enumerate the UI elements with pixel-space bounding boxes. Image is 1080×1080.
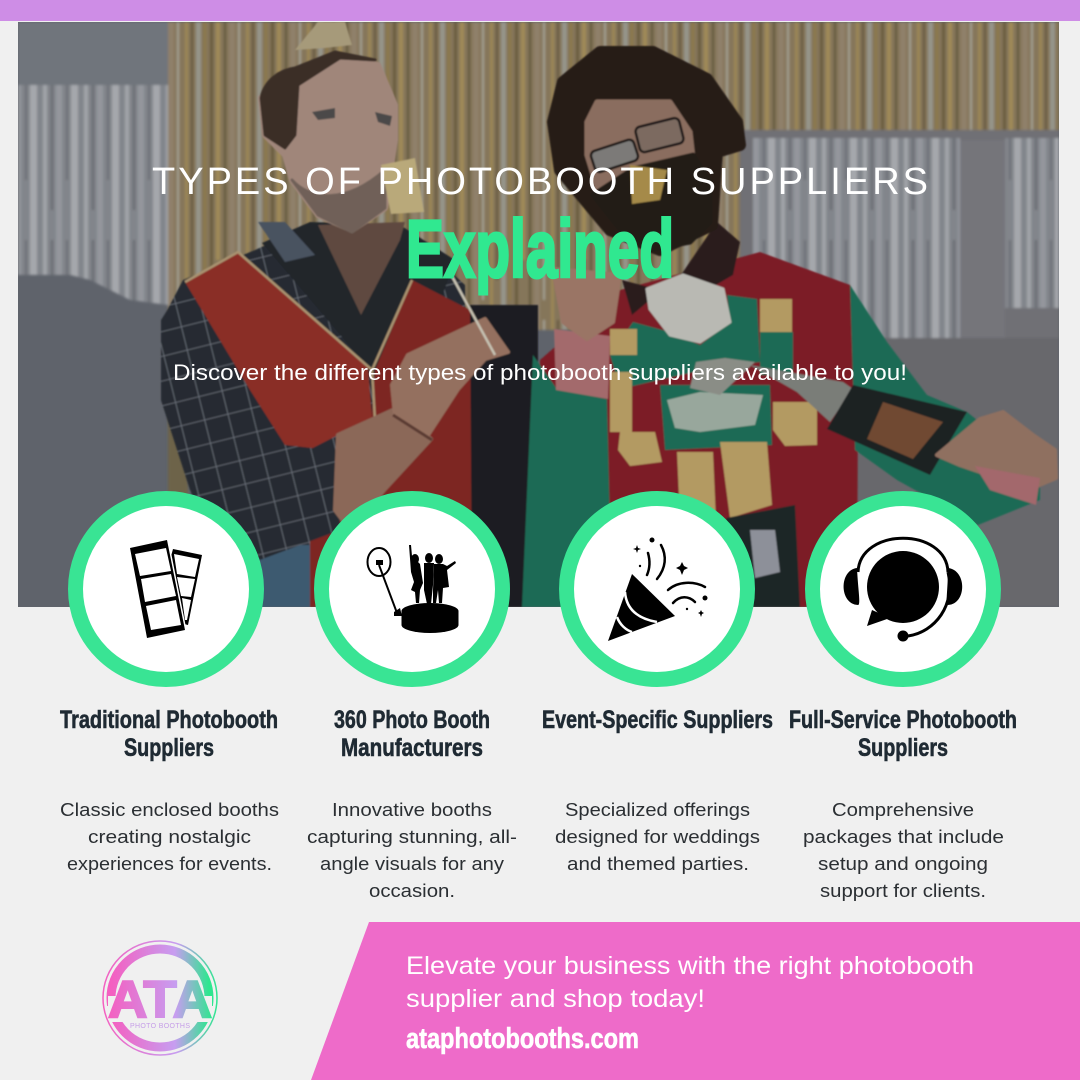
heading [60, 706, 278, 762]
dark figure behind hand [468, 305, 538, 607]
title [152, 161, 928, 295]
description: Specialized offerings [565, 799, 750, 820]
panel: 360 photo booth manufacturers [307, 498, 517, 901]
description [803, 799, 1004, 901]
description [60, 799, 279, 874]
website url: ataphotobooths.com [406, 1023, 639, 1055]
call-to-action banner [311, 922, 1080, 1080]
description: Comprehensive [832, 799, 974, 820]
title: TYPES OF PHOTOBOOTH SUPPLIERS [152, 161, 928, 203]
heading: Event-Specific Suppliers [542, 706, 773, 734]
heading: Full-Service Photobooth [789, 706, 1017, 734]
icon badge: party popper [566, 498, 748, 680]
call-to-action text: Elevate your business with the right photobooth [406, 952, 974, 980]
description: experiences for events. [67, 853, 272, 874]
logo: ATA Photo Booths: ATA [108, 971, 212, 1029]
heading [789, 706, 1017, 762]
icon badge: photo strips [76, 498, 256, 680]
description: setup and ongoing [818, 853, 988, 874]
forearm and hand [335, 409, 431, 530]
panel: traditional photobooth suppliers [60, 498, 279, 874]
description [555, 799, 760, 874]
description: support for clients. [820, 880, 986, 901]
heading: Suppliers [858, 734, 948, 762]
description: angle visuals for any [320, 853, 505, 874]
description: and themed parties. [567, 853, 749, 874]
vest [185, 252, 375, 455]
description: packages that include [803, 826, 1004, 847]
plaid sleeve [160, 313, 340, 560]
green sleeve left [522, 355, 612, 607]
call-to-action text: supplier and shop today! [406, 985, 705, 1013]
heading: Manufacturers [341, 734, 483, 762]
heading [334, 706, 490, 762]
description: creating nostalgic [88, 826, 251, 847]
right sleeve [850, 285, 1040, 525]
icon badge: 360 booth platform [322, 498, 502, 680]
heading: Traditional Photobooth [60, 706, 278, 734]
description: occasion. [369, 880, 455, 901]
description: designed for weddings [555, 826, 760, 847]
top accent bar [0, 0, 1080, 21]
right tinsel and wall [740, 130, 1059, 350]
description [307, 799, 517, 901]
panel: event-specific suppliers [542, 498, 773, 874]
right man hair, face, beard [553, 52, 740, 250]
logo: ATA Photo Booths [103, 941, 217, 1055]
chest pieces [610, 295, 760, 389]
title accent word: Explained [406, 204, 674, 295]
icon badge: headset speech bubble [812, 498, 994, 680]
heading: Suppliers [124, 734, 214, 762]
left man neck and head [318, 222, 405, 315]
left man torso [168, 245, 466, 546]
description: Classic enclosed booths [60, 799, 279, 820]
call-to-action text [406, 952, 974, 1055]
description: capturing stunning, all- [307, 826, 517, 847]
right man sweater base [530, 252, 858, 607]
heading: 360 Photo Booth [334, 706, 490, 734]
panel: full-service photobooth suppliers [789, 498, 1017, 901]
logo: ATA Photo Booths: PHOTO BOOTHS [130, 1023, 190, 1030]
subtitle: Discover the different types of photobooth suppliers available to you! [173, 360, 907, 385]
description: Innovative booths [332, 799, 492, 820]
hero photo: two men in festive sweaters with darkened overlay [18, 22, 1059, 607]
